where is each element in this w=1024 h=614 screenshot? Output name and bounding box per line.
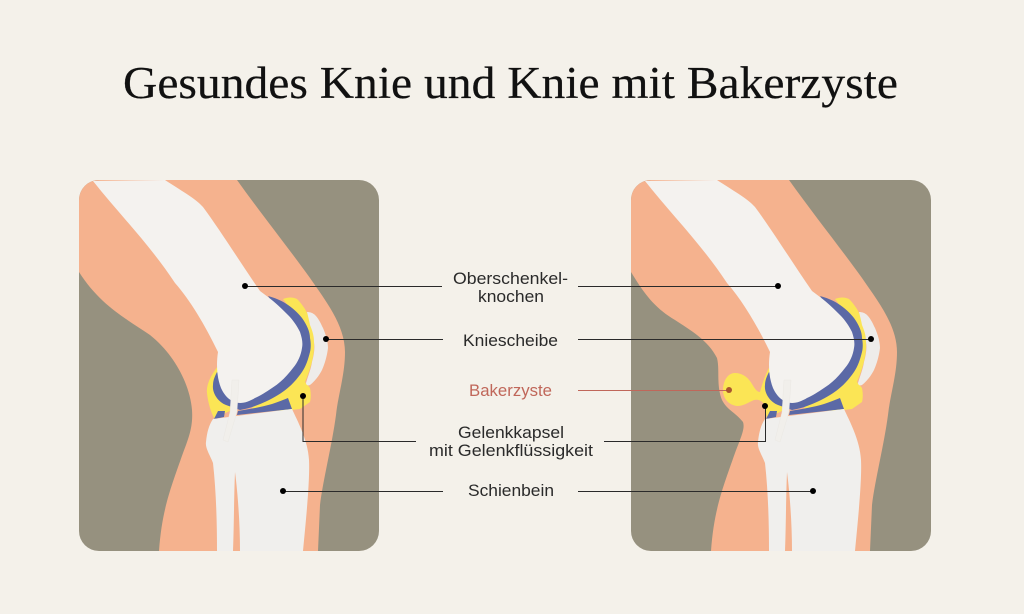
panel: knee with Baker's cyst (631, 180, 931, 551)
patella (306, 312, 328, 385)
pointer: Oberschenkelknochen right (578, 283, 781, 289)
label: Schienbein: Schienbein (468, 481, 554, 500)
pointer: Gelenkkapsel right (604, 403, 768, 442)
label: Oberschenkelknochen (453, 269, 568, 306)
pointer: Gelenkkapsel left (300, 393, 416, 442)
femur (93, 180, 302, 403)
yellow joint capsule and cyst (723, 298, 866, 418)
label: Gelenkkapsel mit Gelenkflüssigkeit (429, 423, 593, 460)
blue cartilage (765, 296, 863, 410)
label: Oberschenkelknochen: Oberschenkel- (453, 269, 568, 288)
pointer: Bakerzyste (578, 387, 732, 393)
tibia (206, 409, 309, 551)
blue meniscus (214, 398, 292, 419)
label: Bakerzyste: Bakerzyste (469, 381, 552, 400)
ligament (223, 380, 239, 442)
title: Gesundes Knie und Knie mit Bakerzyste (123, 58, 898, 108)
pointer: Oberschenkelknochen left (242, 283, 442, 289)
skin (79, 180, 345, 551)
pointer: Kniescheibe right (578, 336, 874, 342)
pointer: Schienbein left (280, 488, 443, 494)
label: Gelenkkapsel mit Gelenkflüssigkeit: mit Gelenkflüssigkeit (429, 441, 593, 460)
tibia (758, 409, 861, 551)
label: Oberschenkelknochen: knochen (478, 287, 544, 306)
pointer: Kniescheibe left (323, 336, 443, 342)
blue cartilage (213, 296, 311, 410)
ligament (775, 380, 791, 442)
patella (858, 312, 880, 385)
femur (645, 180, 854, 403)
label: Kniescheibe: Kniescheibe (463, 331, 558, 350)
label: Gelenkkapsel mit Gelenkflüssigkeit: Gelenkkapsel (458, 423, 564, 442)
yellow joint capsule (207, 298, 314, 418)
pointer: Schienbein right (578, 488, 816, 494)
blue meniscus (766, 398, 844, 419)
panel: healthy knee (79, 180, 379, 551)
skin (631, 180, 897, 551)
